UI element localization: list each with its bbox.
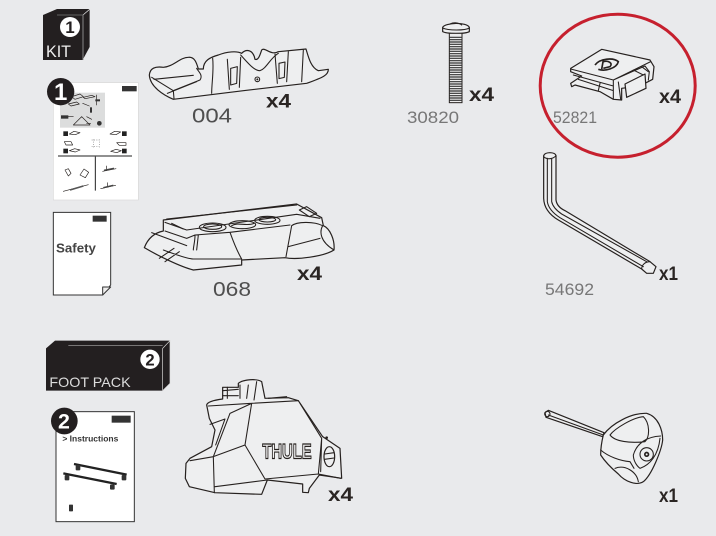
part 004 bracket <box>149 49 328 99</box>
manual 2 logo tag <box>112 416 131 423</box>
bolt 30820 <box>443 23 469 103</box>
quantity x4 for clip: x4 <box>659 87 681 108</box>
torque tool <box>545 410 663 483</box>
label 52821: 52821 <box>553 108 597 127</box>
safety title: Safety <box>56 240 97 255</box>
hex key 54692 <box>544 153 656 273</box>
quantity x4 for 068: x4 <box>297 264 323 285</box>
quantity x1 for tool: x1 <box>659 486 678 507</box>
label 004: 004 <box>192 106 232 128</box>
manual illustration area <box>60 93 105 128</box>
quantity x4 for 004: x4 <box>266 92 292 112</box>
part 068 base <box>144 204 334 270</box>
label 30820: 30820 <box>407 108 459 127</box>
thule logo: THULE <box>262 440 312 464</box>
quantity x4 for bolt: x4 <box>469 85 495 106</box>
label 068: 068 <box>213 279 251 301</box>
clip nut 52821 <box>571 49 654 100</box>
manual small diagrams <box>58 94 132 191</box>
safety leaflet <box>53 212 111 295</box>
foot pack box heading: FOOT PACK <box>49 375 131 390</box>
roof bars illustration <box>63 464 127 511</box>
quantity x1 for hex key: x1 <box>659 264 678 285</box>
manual logo tag <box>122 86 137 91</box>
instruction manual 1 <box>47 78 138 200</box>
part thule foot <box>185 380 342 494</box>
foot pack box heading <box>46 341 170 391</box>
badge 1: 1 <box>54 79 67 106</box>
badge 2: 2 <box>58 410 70 434</box>
quantity x4 for foot: x4 <box>328 485 354 506</box>
foot pack box heading: 2 <box>145 350 155 369</box>
kit box heading: 1 <box>65 18 75 37</box>
kit box heading <box>43 9 90 61</box>
red highlight circle <box>540 14 695 157</box>
kit box heading: KIT <box>46 42 71 61</box>
manual 2 title: > Instructions <box>62 435 119 444</box>
instruction manual 2 <box>51 408 134 522</box>
safety logo tag <box>93 216 107 222</box>
label 54692: 54692 <box>545 280 594 299</box>
